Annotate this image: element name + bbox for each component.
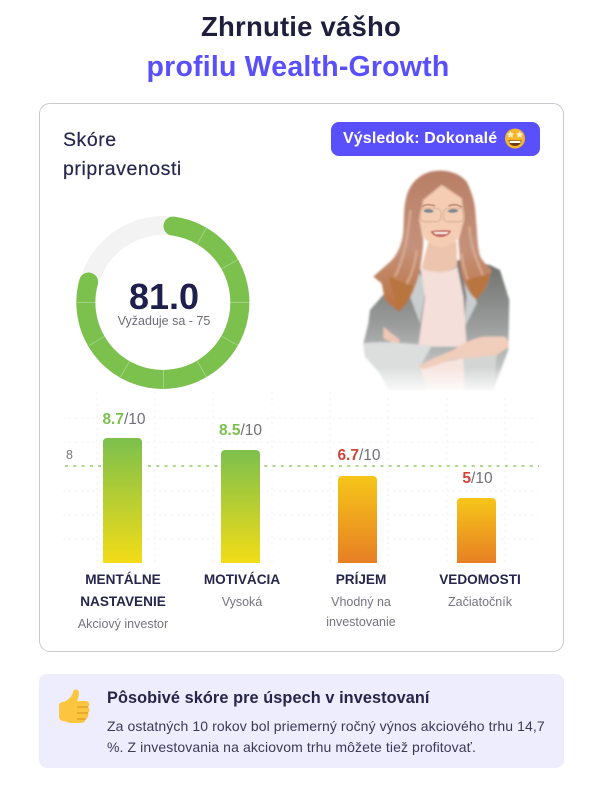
shirt — [418, 267, 467, 347]
result badge — [331, 122, 540, 156]
score value: 81.0 — [129, 276, 199, 317]
value: 6.7/10: 6.7/10 — [337, 447, 381, 464]
label: Vedomosti: VEDOMOSTI — [439, 572, 521, 587]
left sleeve — [363, 342, 432, 390]
value: 5/10: 5/10 — [462, 470, 493, 487]
bar: Príjem — [338, 476, 377, 563]
label: Vedomosti — [439, 572, 521, 609]
callout text: %. Z investovania na akciovom trhu môžete tiež profitovať. — [107, 739, 476, 755]
collar — [410, 260, 477, 330]
title — [147, 11, 449, 83]
hair — [373, 171, 492, 312]
label: Motivácia: MOTIVÁCIA — [204, 572, 280, 587]
forearm — [418, 337, 509, 369]
bar: Motivácia — [221, 450, 260, 563]
icon: star-struck emoji — [505, 128, 525, 148]
callout panel — [39, 674, 564, 768]
glasses — [420, 208, 441, 222]
label: Príjem — [326, 572, 396, 628]
label: Príjem: investovanie — [326, 614, 396, 628]
title: profilu Wealth-Growth — [147, 51, 449, 83]
bar: Vedomosti — [457, 498, 496, 563]
eyes — [423, 209, 459, 213]
label: Príjem: Vhodný na — [331, 595, 391, 609]
bar chart grid — [63, 392, 538, 562]
callout text — [107, 718, 545, 755]
jacket — [363, 260, 509, 390]
lower shirt — [420, 358, 467, 390]
neck — [422, 242, 457, 272]
value: 8.5/10: 8.5/10 — [219, 422, 262, 439]
label: Vedomosti: Začiatočník — [448, 595, 512, 609]
label: Mentálne nastavenie: MENTÁLNE — [85, 572, 161, 587]
score requirement: Vyžaduje sa - 75 — [118, 314, 210, 328]
title: Zhrnutie vášho — [201, 11, 401, 42]
label: Mentálne nastavenie — [78, 572, 168, 631]
right sleeve — [463, 355, 497, 390]
callout text: Za ostatných 10 rokov bol priemerný ročný výnos akciového trhu 14,7 — [107, 718, 545, 734]
label: Motivácia — [204, 572, 280, 609]
bottom fade — [355, 367, 520, 395]
value: 8.7/10: 8.7/10 — [102, 411, 146, 428]
icon: thumbs up — [59, 690, 90, 723]
face — [419, 185, 464, 247]
label: Mentálne nastavenie: NASTAVENIE — [80, 594, 166, 609]
callout heading: Pôsobivé skóre pre úspech v investovaní — [107, 689, 430, 707]
threshold line — [65, 465, 539, 467]
badge label: Výsledok: Dokonalé — [343, 130, 497, 147]
mouth — [431, 230, 451, 237]
donut chart: score 81.0 — [76, 216, 250, 389]
illustration: woman with crossed arms — [362, 169, 511, 394]
bar: Mentálne nastavenie — [103, 438, 142, 563]
heading: readiness score: pripravenosti — [63, 158, 182, 180]
threshold label: 8 — [66, 448, 73, 462]
panel: readiness score — [39, 103, 564, 652]
left hand — [383, 327, 400, 345]
label: Príjem: PRÍJEM — [336, 572, 386, 587]
heading: readiness score — [63, 129, 182, 180]
label: Mentálne nastavenie: Akciový investor — [78, 617, 168, 631]
heading: readiness score: Skóre — [63, 129, 117, 151]
label: Motivácia: Vysoká — [222, 595, 262, 609]
eyebrows — [422, 205, 462, 207]
